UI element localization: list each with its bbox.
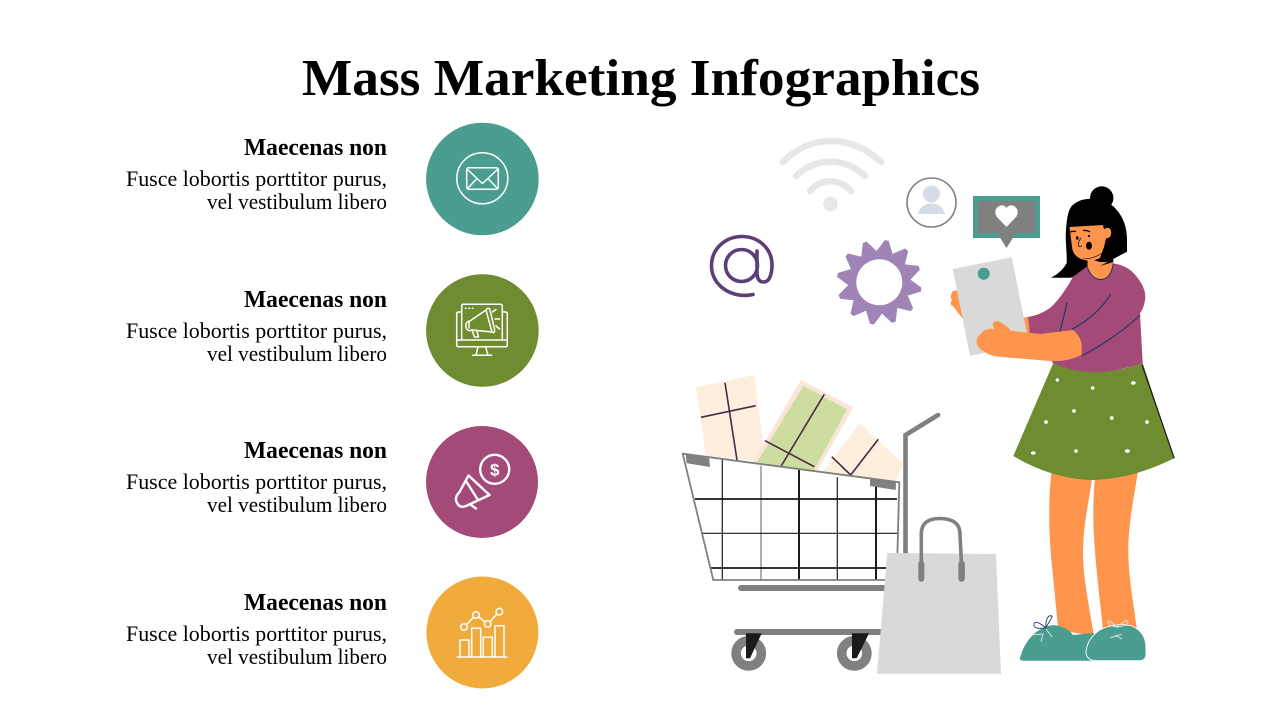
icon: megaphone with dollar bbox=[456, 455, 509, 508]
item 4: analytics bbox=[126, 576, 538, 688]
icon: wifi bbox=[783, 141, 881, 211]
item 3 body text: vel vestibulum libero bbox=[207, 492, 387, 517]
cart basket bbox=[683, 454, 899, 580]
forearm behind tablet bbox=[1020, 317, 1032, 335]
icon: envelope bbox=[457, 153, 508, 204]
paper: green package bbox=[752, 380, 853, 472]
cart wheel left bbox=[736, 633, 762, 666]
item 2 body text: vel vestibulum libero bbox=[207, 341, 387, 366]
face bbox=[1070, 225, 1113, 266]
icon: user profile bbox=[907, 178, 956, 227]
woman holding tablet bbox=[951, 186, 1174, 661]
shopping cart bbox=[683, 375, 938, 666]
item 2 circle bbox=[426, 274, 539, 387]
icon: at sign bbox=[711, 236, 772, 295]
item 1 body text: vel vestibulum libero bbox=[207, 189, 387, 214]
front arm and hand bbox=[977, 321, 1082, 361]
paper: right package bbox=[822, 423, 903, 482]
item 4 body text: vel vestibulum libero bbox=[207, 644, 387, 669]
item 3 body text: Fusce lobortis porttitor purus, bbox=[126, 469, 387, 494]
skirt bbox=[1013, 363, 1174, 480]
item 2 body text bbox=[126, 318, 387, 366]
collar line bbox=[1087, 263, 1113, 280]
item 1: email bbox=[126, 123, 539, 235]
icon: bar chart with trend line bbox=[457, 608, 507, 657]
item 3: paid promotion bbox=[126, 426, 538, 538]
title: Mass Marketing Infographics bbox=[302, 50, 980, 107]
item 1 body text bbox=[126, 166, 387, 214]
icon: gear bbox=[836, 239, 923, 326]
item 3 heading: Maecenas non bbox=[244, 438, 387, 464]
item 4 body text bbox=[126, 621, 387, 669]
item 1 heading: Maecenas non bbox=[244, 135, 387, 161]
paper: left package bbox=[696, 375, 766, 462]
item 2 body text: Fusce lobortis porttitor purus, bbox=[126, 318, 387, 343]
icon: monitor with megaphone bbox=[457, 304, 507, 355]
cart lower bars bbox=[737, 588, 885, 632]
item 1 body text: Fusce lobortis porttitor purus, bbox=[126, 166, 387, 191]
item 4 heading: Maecenas non bbox=[244, 590, 387, 616]
cart handle pole bbox=[906, 415, 938, 556]
item 1 circle bbox=[426, 123, 539, 235]
item 3 body text bbox=[126, 469, 387, 517]
shopping bag bbox=[877, 518, 1001, 674]
dollar sign: $ bbox=[490, 460, 500, 479]
item 3 circle bbox=[426, 426, 538, 538]
shoes bbox=[1020, 616, 1146, 661]
neck bbox=[1088, 258, 1113, 279]
hair bbox=[1051, 186, 1127, 278]
item 2 heading: Maecenas non bbox=[244, 287, 387, 313]
sleeve creases bbox=[1060, 294, 1140, 356]
icon: speech bubble with heart bbox=[973, 196, 1040, 248]
item 2: advertising bbox=[126, 274, 539, 387]
tablet bbox=[953, 257, 1029, 356]
legs bbox=[1049, 470, 1138, 636]
item 4 body text: Fusce lobortis porttitor purus, bbox=[126, 621, 387, 646]
back hand bbox=[951, 290, 970, 318]
sweater bbox=[1028, 264, 1145, 372]
item 4 circle bbox=[426, 576, 538, 688]
cart wheel right bbox=[842, 633, 869, 666]
